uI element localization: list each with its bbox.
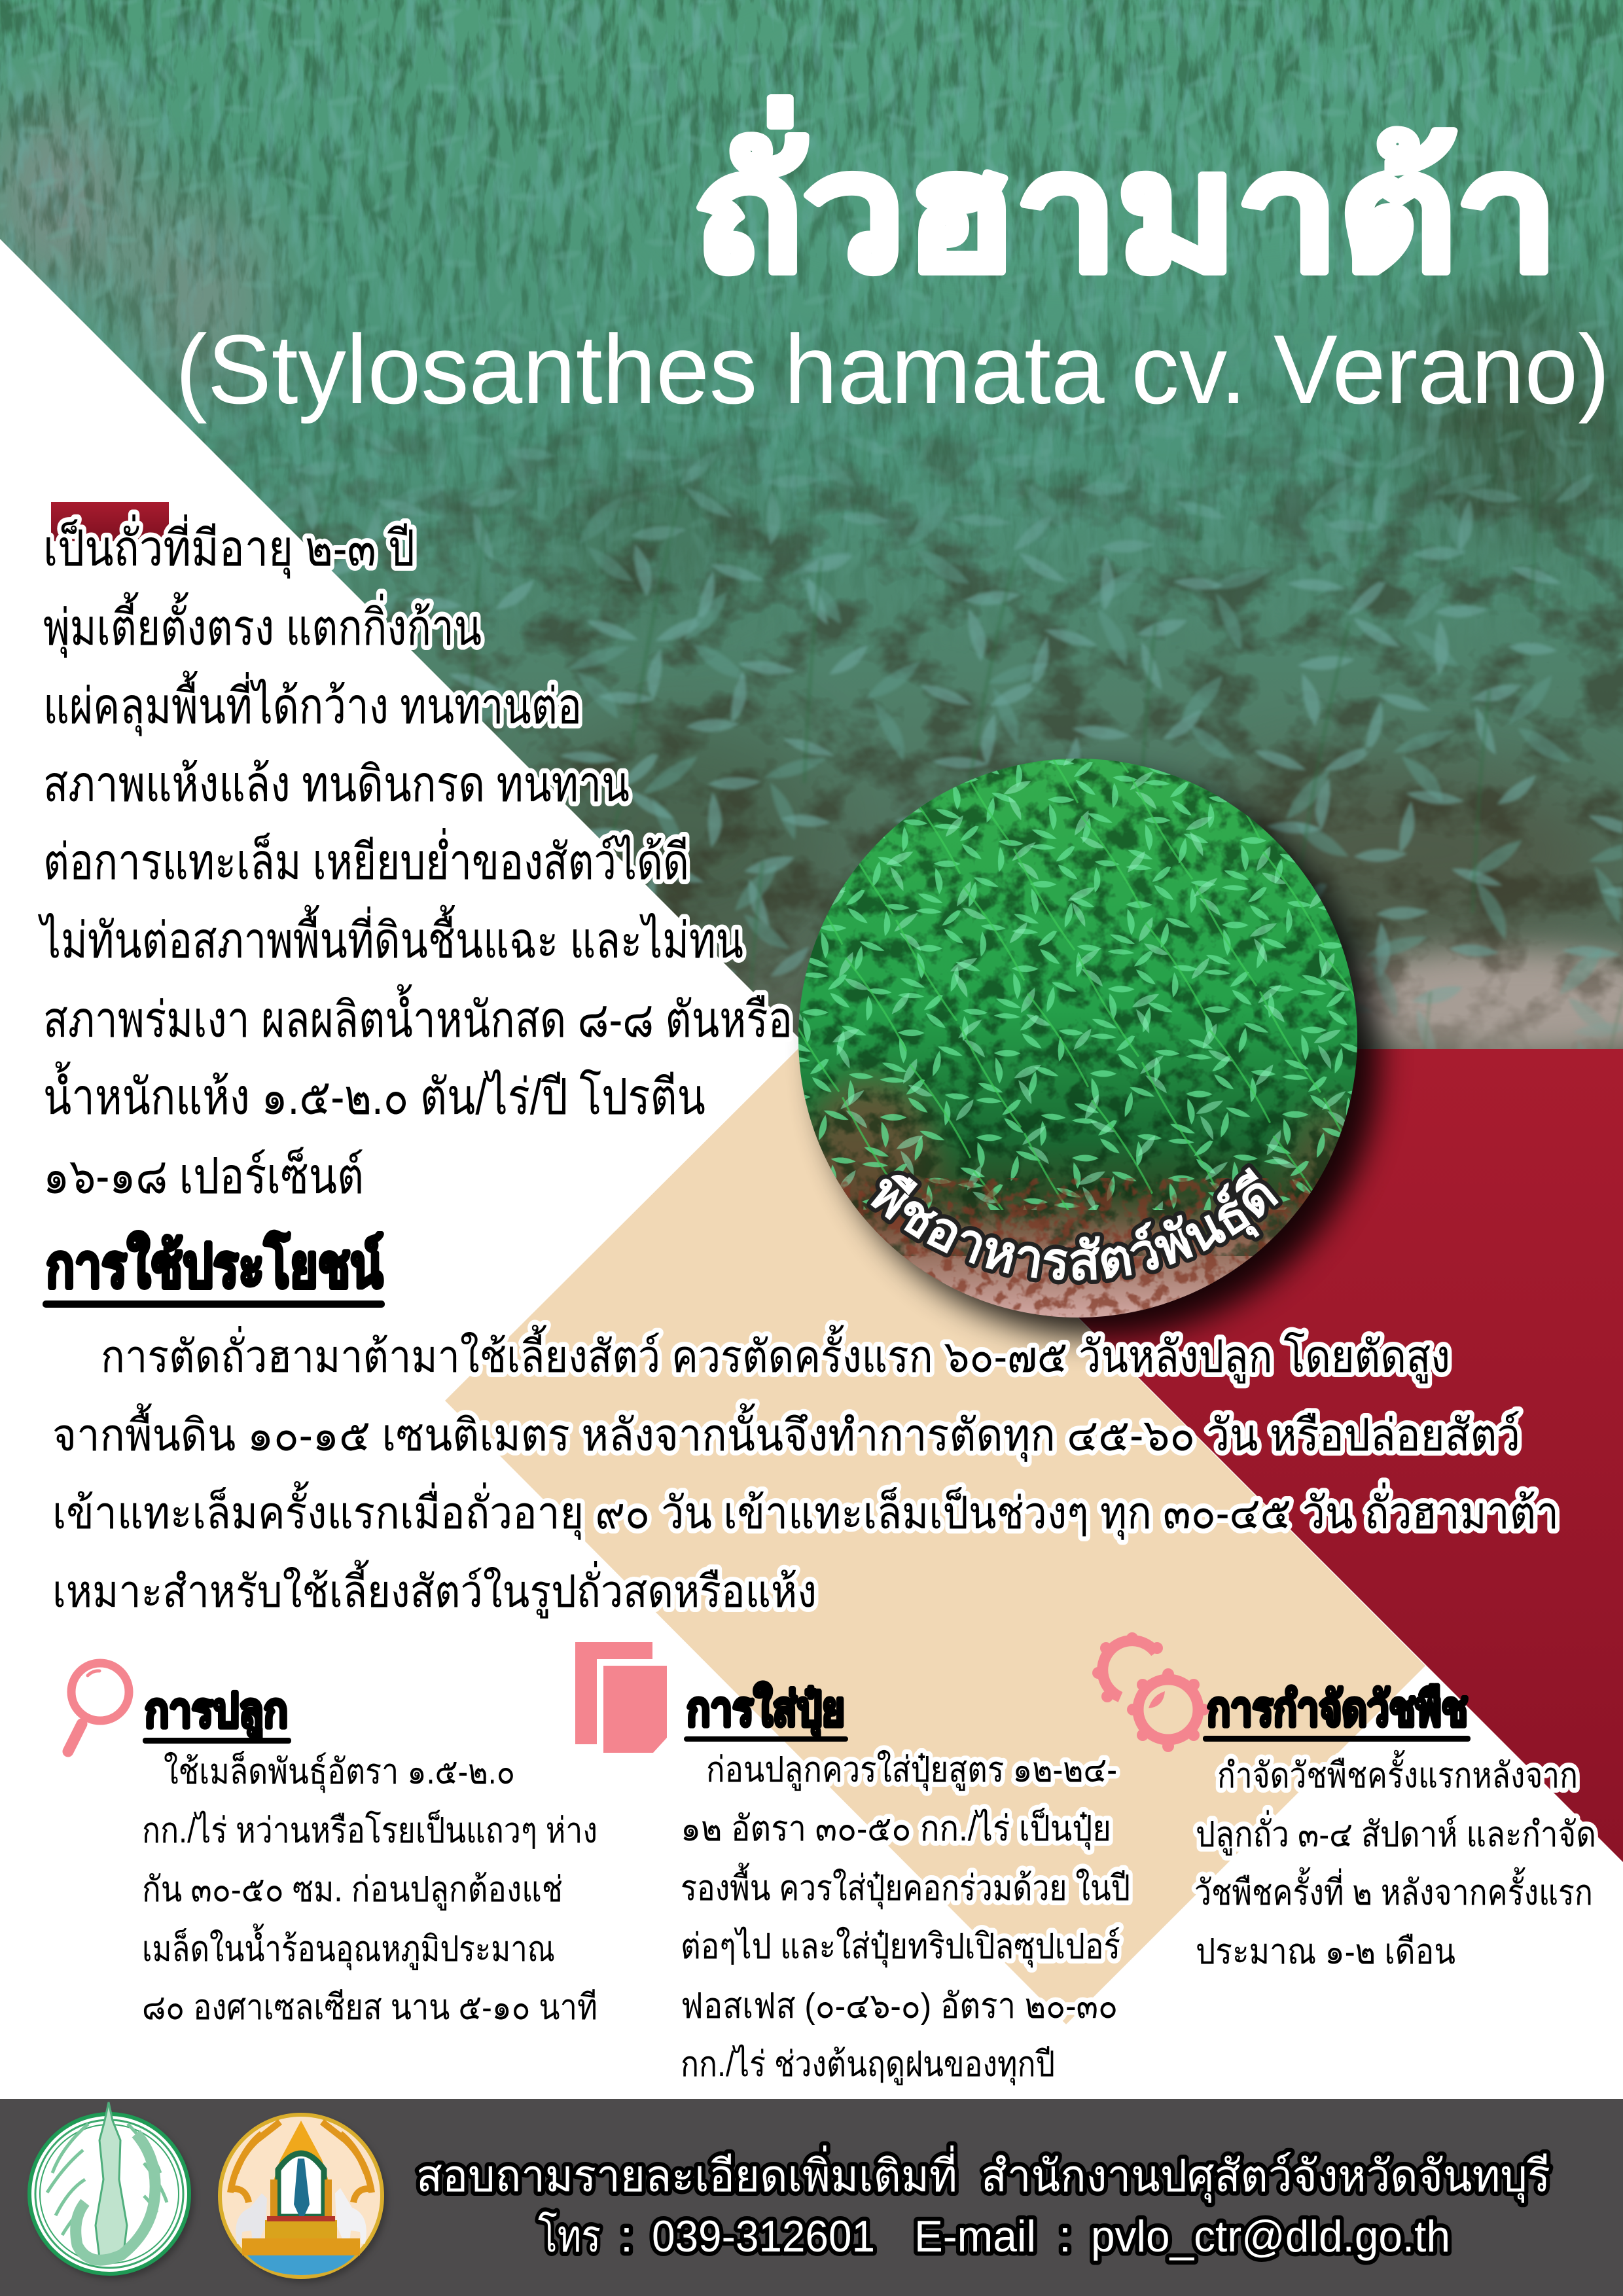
planting text: กัน ๓๐-๕๐ ซม. ก่อนปลูกต้องแช่ — [142, 1870, 563, 1910]
section: planting — [68, 1663, 597, 2027]
plant description: สภาพร่มเงา ผลผลิตน้ำหนักสด ๘-๘ ตันหรือ — [43, 984, 793, 1048]
footer contact text — [416, 2145, 1550, 2261]
planting text: ใช้เมล็ดพันธุ์อัตรา ๑.๕-๒.๐ — [164, 1751, 515, 1793]
phone and email line: : — [1059, 2212, 1071, 2261]
red tab behind description — [51, 502, 169, 541]
background photo: grass field — [0, 0, 1623, 1054]
fertilizer text: รองพื้น ควรใส่ปุ๋ยคอกร่วมด้วย ในปี — [681, 1863, 1130, 1910]
plant description: น้ำหนักแห้ง ๑.๕-๒.๐ ตัน/ไร่/ปี โปรตีน — [43, 1061, 705, 1125]
fertilizer text — [681, 1749, 1130, 2086]
uses paragraph: การตัดถั่วฮามาต้ามาใช้เลี้ยงสัตว์ ควรตัดครั้งแรก ๖๐-๗๕ วันหลังปลูก โดยตัดสูง — [101, 1325, 1450, 1384]
circular plant photo with caption — [798, 759, 1357, 1318]
icon: gears — [1092, 1632, 1209, 1752]
planting text — [142, 1751, 597, 2027]
weed control text — [1194, 1750, 1596, 1971]
plant description: ต่อการแทะเล็ม เหยียบย่ำของสัตว์ได้ดี — [43, 828, 689, 890]
section: fertilizer — [575, 1642, 1130, 2086]
inset photo — [798, 759, 1368, 1318]
heading: weed control: การกำจัดวัชพืช — [1207, 1683, 1468, 1736]
enquiry line: สำนักงานปศุสัตว์จังหวัดจันทบุรี — [981, 2151, 1550, 2203]
plant description: แผ่คลุมพื้นที่ได้กว้าง ทนทานต่อ — [43, 670, 582, 736]
enquiry line: สอบถามรายละเอียดเพิ่มเติมที่ — [416, 2145, 957, 2201]
weed control text: ประมาณ ๑-๒ เดือน — [1196, 1932, 1455, 1971]
fertilizer text: ๑๒ อัตรา ๓๐-๕๐ กก./ไร่ เป็นปุ๋ย — [681, 1808, 1111, 1850]
title: ถั่วฮามาต้า — [694, 98, 1558, 304]
phone and email line: E-mail — [914, 2212, 1036, 2261]
photo tonal patches — [0, 33, 1623, 1054]
circular shadow — [819, 777, 1380, 1337]
beige diamond panel — [445, 1043, 1425, 2024]
plant description: สภาพแห้งแล้ง ทนดินกรด ทนทาน — [43, 757, 630, 812]
footer band — [0, 2099, 1623, 2296]
logo: Chanthaburi province seal — [220, 2115, 387, 2282]
plant description: พุ่มเตี้ยตั้งตรง แตกกิ่งก้าน — [43, 592, 482, 658]
planting text: กก./ไร่ หว่านหรือโรยเป็นแถวๆ ห่าง — [142, 1810, 597, 1850]
plant description — [37, 514, 793, 1204]
uses paragraph — [52, 1325, 1559, 1619]
phone and email line: โทร — [538, 2211, 601, 2261]
fertilizer text: ต่อๆไป และใส่ปุ๋ยทริปเปิลซุปเปอร์ — [681, 1926, 1120, 1968]
icon: magnifier — [68, 1663, 129, 1751]
uses paragraph: จากพื้นดิน ๑๐-๑๕ เซนติเมตร หลังจากนั้นจึงทำการตัดทุก ๔๕-๖๐ วัน หรือปล่อยสัตว์ — [52, 1403, 1520, 1462]
planting text: ๘๐ องศาเซลเซียส นาน ๕-๑๐ นาที — [142, 1988, 597, 2027]
icon: document pages — [575, 1642, 667, 1753]
phone and email line: 039-312601 — [652, 2212, 875, 2261]
plant description: เป็นถั่วที่มีอายุ ๒-๓ ปี — [43, 514, 415, 579]
fertilizer text: ฟอสเฟส (๐-๔๖-๐) อัตรา ๒๐-๓๐ — [681, 1986, 1118, 2026]
planting text: เมล็ดในน้ำร้อนอุณหภูมิประมาณ — [142, 1924, 555, 1971]
heading: uses: การใช้ประโยชน์ — [46, 1231, 383, 1300]
section: weed control — [1092, 1632, 1596, 1971]
heading: planting: การปลูก — [145, 1685, 288, 1740]
fertilizer text: กก./ไร่ ช่วงต้นฤดูฝนของทุกปี — [681, 2044, 1055, 2086]
phone and email line: : — [620, 2212, 633, 2261]
curved caption: พืชอาหารสัตว์พันธุ์ดี — [866, 1163, 1283, 1285]
phone and email line: pvlo_ctr@dld.go.th — [1091, 2212, 1450, 2261]
fertilizer text: ก่อนปลูกควรใส่ปุ๋ยสูตร ๑๒-๒๔- — [706, 1749, 1117, 1791]
plant description: ไม่ทันต่อสภาพพื้นที่ดินชื้นแฉะ และไม่ทน — [37, 905, 743, 969]
red panel — [810, 1049, 1623, 1862]
uses paragraph: เหมาะสำหรับใช้เลี้ยงสัตว์ในรูปถั่วสดหรือแห้ง — [52, 1560, 817, 1619]
plant description: ๑๖-๑๘ เปอร์เซ็นต์ — [43, 1147, 364, 1204]
subtitle: scientific name: (Stylosanthes hamata cv. Verano) — [175, 314, 1610, 424]
phone and email line — [538, 2211, 1450, 2261]
logo: Department of Livestock Development — [29, 2102, 194, 2279]
heading: fertilizer: การใส่ปุ๋ย — [687, 1681, 845, 1739]
enquiry line — [416, 2145, 1550, 2203]
